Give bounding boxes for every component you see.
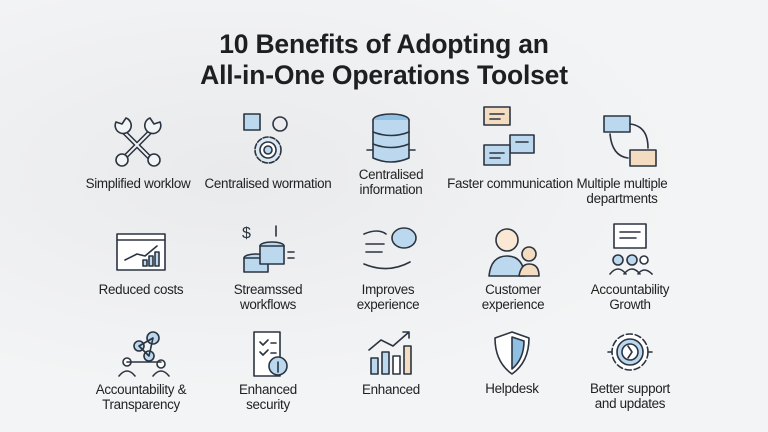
label: Growth bbox=[609, 296, 651, 312]
label: Simplified worklow bbox=[86, 176, 190, 191]
label: information bbox=[360, 182, 422, 196]
label bbox=[577, 176, 668, 206]
label: Centralised wormation bbox=[205, 176, 331, 191]
label: departments bbox=[586, 190, 658, 206]
icon: gear clock bbox=[607, 333, 653, 371]
label: experience bbox=[482, 296, 544, 312]
title bbox=[200, 29, 568, 90]
label: Enhanced bbox=[362, 382, 420, 397]
label bbox=[239, 382, 297, 412]
icon: coins bbox=[242, 225, 295, 273]
label: workflows bbox=[240, 296, 296, 312]
icon: chat bubbles bbox=[483, 106, 535, 166]
icon: shield bbox=[494, 331, 530, 375]
icon: network bbox=[118, 331, 170, 377]
icon: growth bars bbox=[368, 331, 412, 375]
icon: wrenches bbox=[114, 117, 162, 167]
label bbox=[96, 382, 186, 412]
label: Centralised bbox=[359, 167, 423, 182]
label: Helpdesk bbox=[485, 381, 539, 396]
label: Accountability & bbox=[96, 382, 186, 397]
label: Better support bbox=[590, 381, 670, 396]
icon: exchange chat bbox=[603, 115, 657, 167]
label: Reduced costs bbox=[99, 282, 183, 297]
icon: team chat bbox=[609, 223, 653, 275]
label bbox=[590, 381, 670, 411]
label: Transparency bbox=[102, 396, 180, 412]
label bbox=[357, 282, 419, 312]
title: All-in-One Operations Toolset bbox=[200, 60, 568, 90]
label: Enhanced bbox=[239, 382, 297, 397]
icon: people bbox=[488, 228, 540, 277]
label bbox=[359, 167, 423, 196]
icon: database bbox=[366, 113, 416, 163]
icon: gear with window bbox=[243, 113, 288, 164]
icon: chart window bbox=[116, 233, 166, 271]
label: experience bbox=[357, 296, 419, 312]
label: Multiple multiple bbox=[577, 176, 667, 191]
label: Improves bbox=[362, 282, 414, 297]
label bbox=[482, 282, 544, 312]
label: Customer bbox=[485, 282, 541, 297]
icon: coins: $ bbox=[242, 225, 251, 242]
icon: clipboard bbox=[253, 331, 288, 377]
label: Faster communication bbox=[447, 176, 573, 191]
label: and updates bbox=[595, 396, 665, 410]
label: Streamssed bbox=[234, 282, 302, 297]
title: 10 Benefits of Adopting an bbox=[219, 29, 549, 59]
label bbox=[590, 282, 670, 312]
icon: arrows and chat bbox=[363, 227, 417, 270]
label bbox=[234, 282, 302, 312]
label: security bbox=[246, 396, 290, 412]
label: Accountability bbox=[591, 282, 669, 297]
